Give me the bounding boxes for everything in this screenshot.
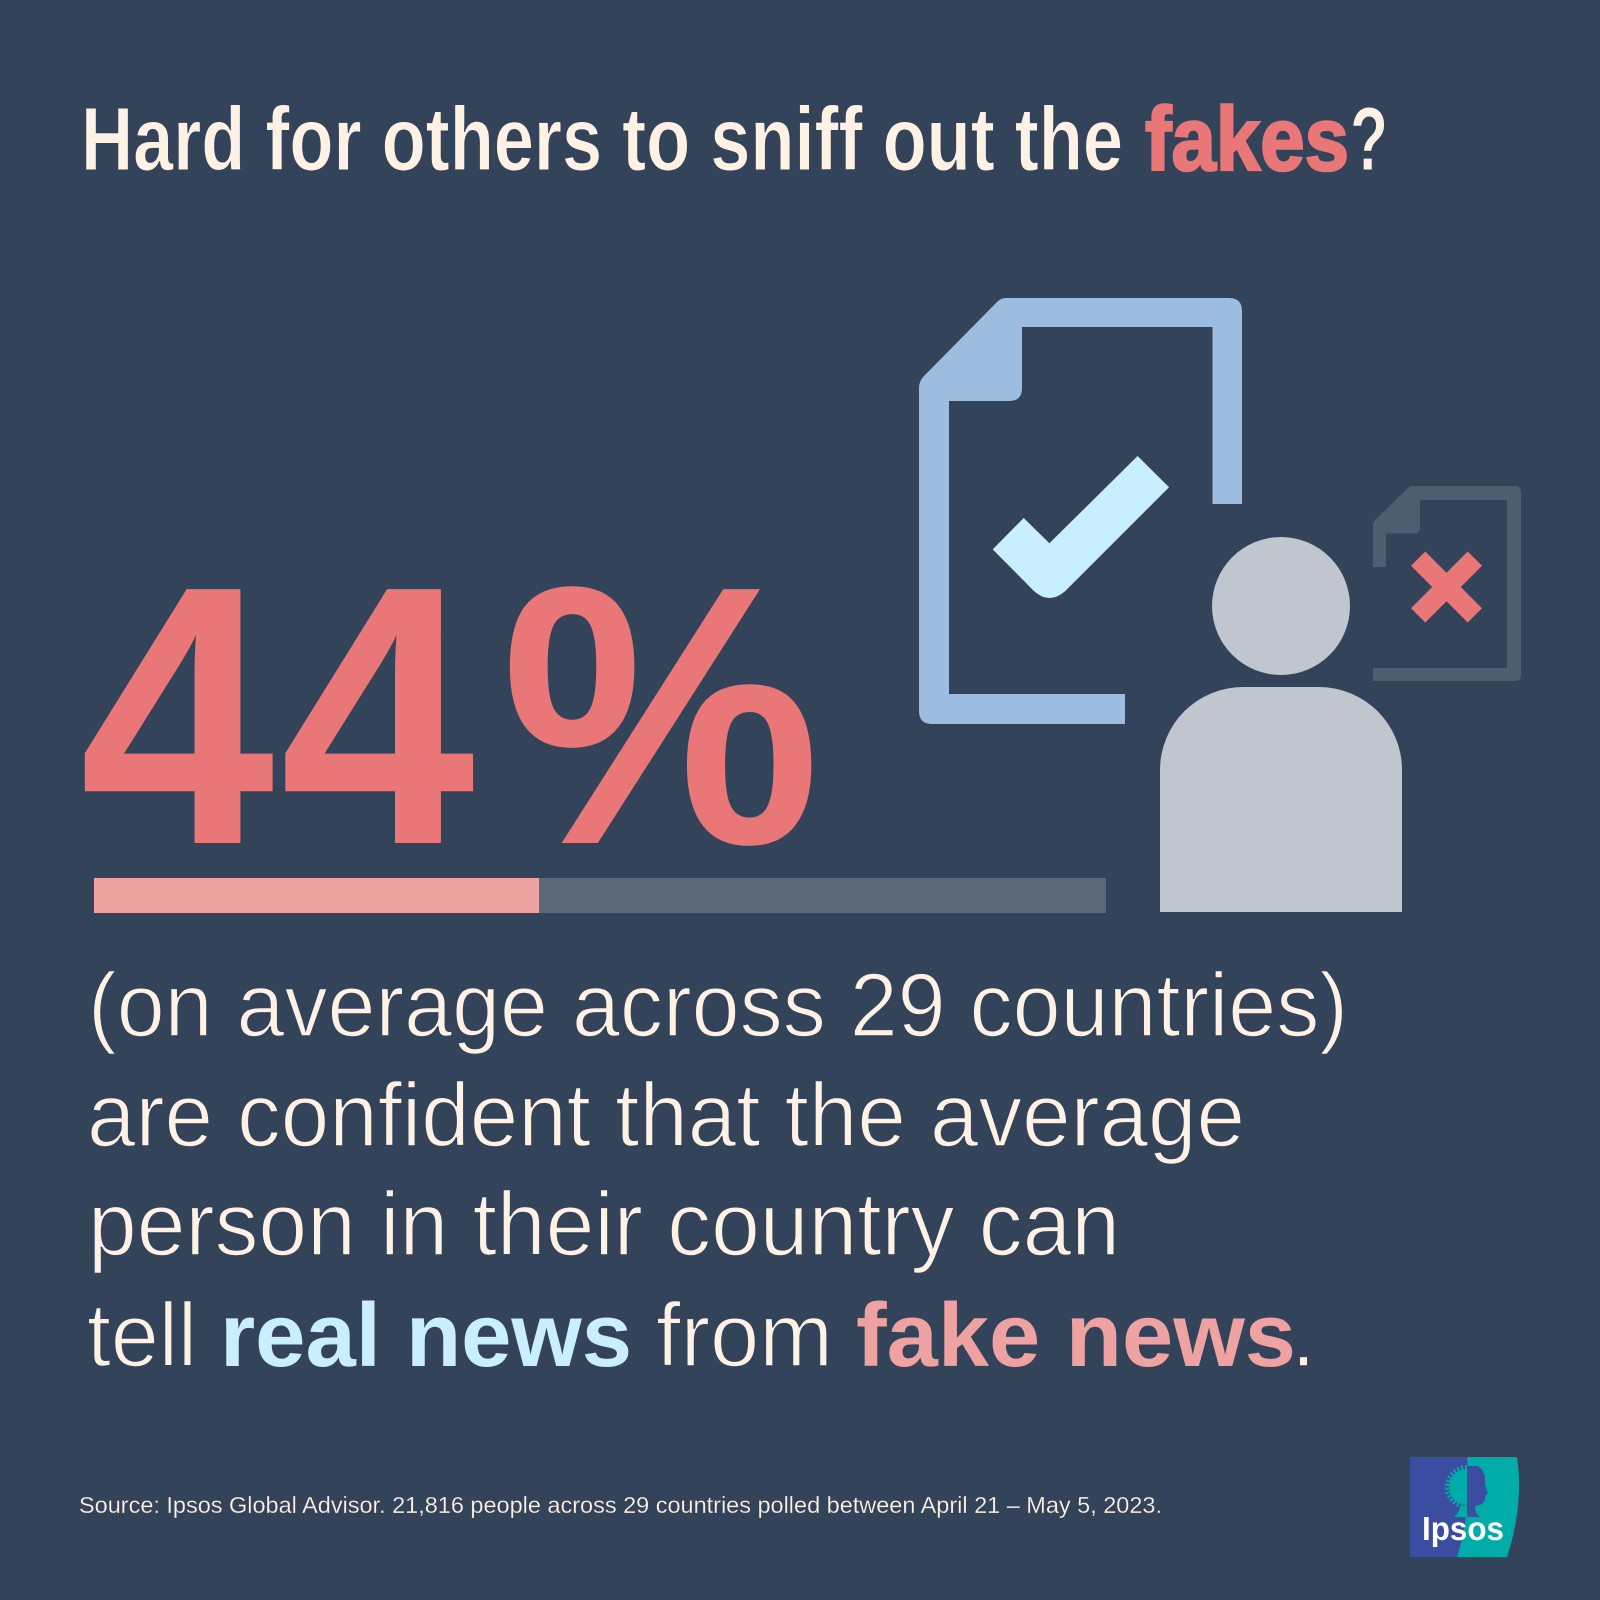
big percentage: 4 [80,510,277,922]
icon: real document with check mark [919,298,1242,724]
body text: . [1291,1286,1316,1386]
title: Hard for others to sniff out the [81,90,1123,190]
body text: from [656,1286,833,1386]
icon: person [1160,537,1402,912]
logo: Ipsos: Ipsos [1422,1510,1504,1547]
big percentage: % [501,510,821,922]
body text: are confident that the average [87,1066,1245,1166]
big percentage [80,510,821,922]
body text [87,956,1348,1386]
body text: real news [220,1286,632,1386]
source note: Source: Ipsos Global Advisor. 21,816 people across 29 countries polled between April 21 – May 5, 2023. [79,1492,1162,1518]
body text: person in their country can [88,1175,1120,1275]
body text: fake news [856,1286,1296,1386]
title: ? [1350,90,1388,190]
title: fakes [1145,90,1349,190]
body text: tell [87,1286,197,1386]
icon: fake document with cross [1373,486,1521,681]
progress bar [94,878,1106,913]
body text: (on average across 29 countries) [88,956,1348,1056]
big percentage: 4 [280,510,477,922]
logo: Ipsos [1410,1457,1519,1557]
